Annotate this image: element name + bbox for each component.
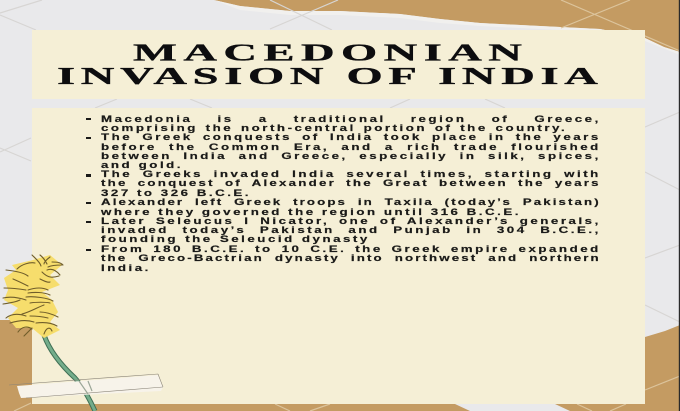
text block: bullet list: before the Common Era, and a rich trade flourished xyxy=(101,142,601,153)
bullet: Macedonia xyxy=(86,114,601,134)
icon: yellow flower head xyxy=(3,255,63,338)
title: INVASION OF INDIA xyxy=(57,63,598,90)
text block: bullet list: the Greco-Bactrian dynasty into northwest and northern xyxy=(101,253,601,264)
text block: bullet list: where they governed the region until 316 B.C.E. xyxy=(101,207,521,218)
text block: bullet list: 327 to 326 B.C.E. xyxy=(101,188,251,199)
kraft paper: bottom right xyxy=(555,325,680,411)
kraft paper: bottom left and bottom strip xyxy=(0,320,470,411)
bullet: Seleucus xyxy=(86,216,601,245)
bullet: Greco-Bactrian xyxy=(86,244,601,274)
bullet: Greek conquests xyxy=(86,132,601,171)
text block: bullet list: The Greek conquests of India took place in the years xyxy=(101,132,601,143)
text block: bullet list: between India and Greece, especially in silk, spices, xyxy=(101,151,601,162)
icon: green stem xyxy=(44,335,95,411)
panel: title background xyxy=(32,30,645,99)
text block: bullet list: Alexander left Greek troops in Taxila (today’s Pakistan) xyxy=(101,197,601,208)
kraft paper: top right xyxy=(214,0,680,52)
title xyxy=(57,39,598,90)
text block: bullet list: invaded today’s Pakistan and Punjab in 304 B.C.E., xyxy=(101,225,601,236)
text block: bullet list: The Greeks invaded India several times, starting with xyxy=(101,169,601,180)
text block: bullet list: founding the Seleucid dynasty xyxy=(101,234,370,245)
text block: bullet list: the conquest of Alexander the Great between the years xyxy=(101,178,601,189)
text block: bullet list: Macedonia is a traditional region of Greece, xyxy=(101,114,601,125)
text block: bullet list: comprising the north-central portion of the country. xyxy=(101,123,567,134)
text block: bullet list: and gold. xyxy=(101,160,183,171)
icon: masking tape xyxy=(17,375,163,398)
bullet: Greeks invaded xyxy=(86,169,601,199)
title: MACEDONIAN xyxy=(133,39,522,66)
text block: bullet list: Later Seleucus I Nicator, one of Alexander’s generals, xyxy=(101,216,601,227)
panel: body background xyxy=(32,108,645,404)
bullet: Alexander left xyxy=(86,197,601,218)
text block: bullet list: India. xyxy=(101,263,151,274)
text block: bullet list: From 180 B.C.E. to 10 C.E. the Greek empire expanded xyxy=(101,244,601,255)
